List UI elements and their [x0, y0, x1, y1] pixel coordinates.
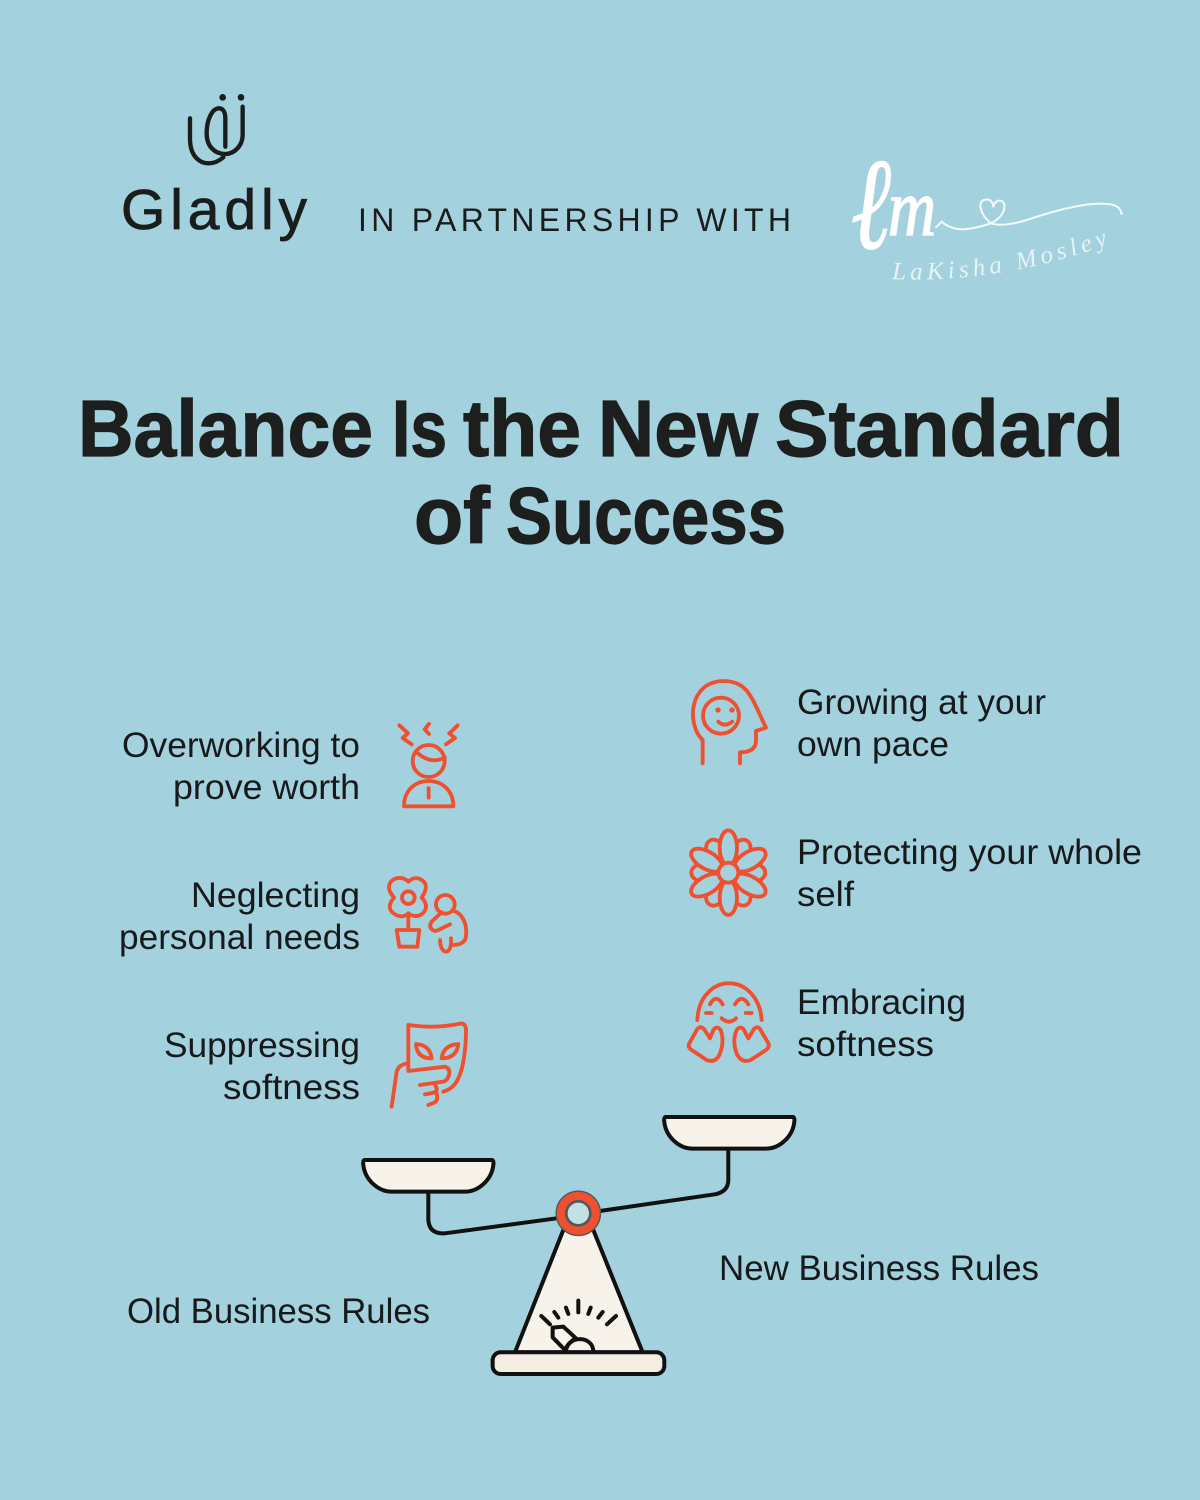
title: Balance — [78, 384, 373, 473]
label: Old Business Rules: Old Business Rules — [127, 1292, 430, 1331]
text: Protecting your whole — [797, 833, 1142, 872]
logo monogram: ℓ — [851, 133, 891, 277]
title: Is — [392, 384, 447, 473]
title: New — [598, 384, 759, 473]
text — [797, 833, 1142, 914]
beam — [428, 1149, 728, 1233]
item: Embracing softness — [689, 983, 966, 1064]
title: of — [414, 471, 490, 560]
scale illustration — [363, 1117, 794, 1374]
logo heart and swash — [936, 199, 1122, 229]
text — [119, 876, 360, 957]
title — [78, 384, 1124, 560]
logo: Gladly — [121, 94, 308, 242]
item: Suppressing softness — [164, 1023, 466, 1107]
text: personal needs — [119, 918, 360, 957]
text — [164, 1026, 360, 1107]
text — [122, 726, 360, 807]
icon: person and wilting flower — [389, 878, 466, 952]
icon: hand holding mask — [392, 1023, 466, 1107]
base — [493, 1352, 664, 1374]
wordmark: Gladly: Gladly — [121, 178, 308, 242]
logo monogram — [851, 133, 936, 277]
right pan — [664, 1117, 794, 1149]
partnership text: IN PARTNERSHIP WITH — [358, 202, 791, 238]
icon: smiling face with hands — [689, 983, 769, 1061]
text — [797, 983, 966, 1064]
logo: LaKisha Mosley: LaKisha Mosley — [892, 234, 1105, 280]
text: Suppressing — [164, 1026, 360, 1065]
item: Protecting your whole self — [687, 830, 1142, 915]
icon: head with smiling face — [693, 681, 766, 763]
title: Success — [506, 471, 786, 560]
text: Neglecting — [191, 876, 360, 915]
item: Growing at your own pace — [693, 681, 1046, 764]
icon: stressed person — [399, 724, 458, 806]
text: softness — [223, 1068, 360, 1107]
item: Overworking to prove worth — [122, 724, 458, 807]
text: self — [797, 875, 854, 914]
text: Overworking to — [122, 726, 360, 765]
text: prove worth — [173, 768, 360, 807]
text — [797, 683, 1046, 764]
logo: LaKisha Mosley — [851, 133, 1123, 280]
text: Embracing — [797, 983, 966, 1022]
text: Growing at your — [797, 683, 1046, 722]
icon: Gladly paperclip mark — [190, 94, 244, 163]
icon: flower — [687, 830, 769, 915]
text: softness — [797, 1025, 934, 1064]
left pan — [363, 1160, 493, 1192]
fulcrum — [515, 1230, 643, 1352]
title: Standard — [775, 384, 1124, 473]
dial — [541, 1301, 616, 1352]
label: New Business Rules: New Business Rules — [719, 1249, 1039, 1288]
title: the — [463, 384, 581, 473]
text: own pace — [797, 725, 949, 764]
logo name — [892, 243, 1112, 280]
pivot ring — [561, 1196, 596, 1231]
item: Neglecting personal needs — [119, 876, 466, 957]
logo monogram: m — [888, 165, 936, 253]
